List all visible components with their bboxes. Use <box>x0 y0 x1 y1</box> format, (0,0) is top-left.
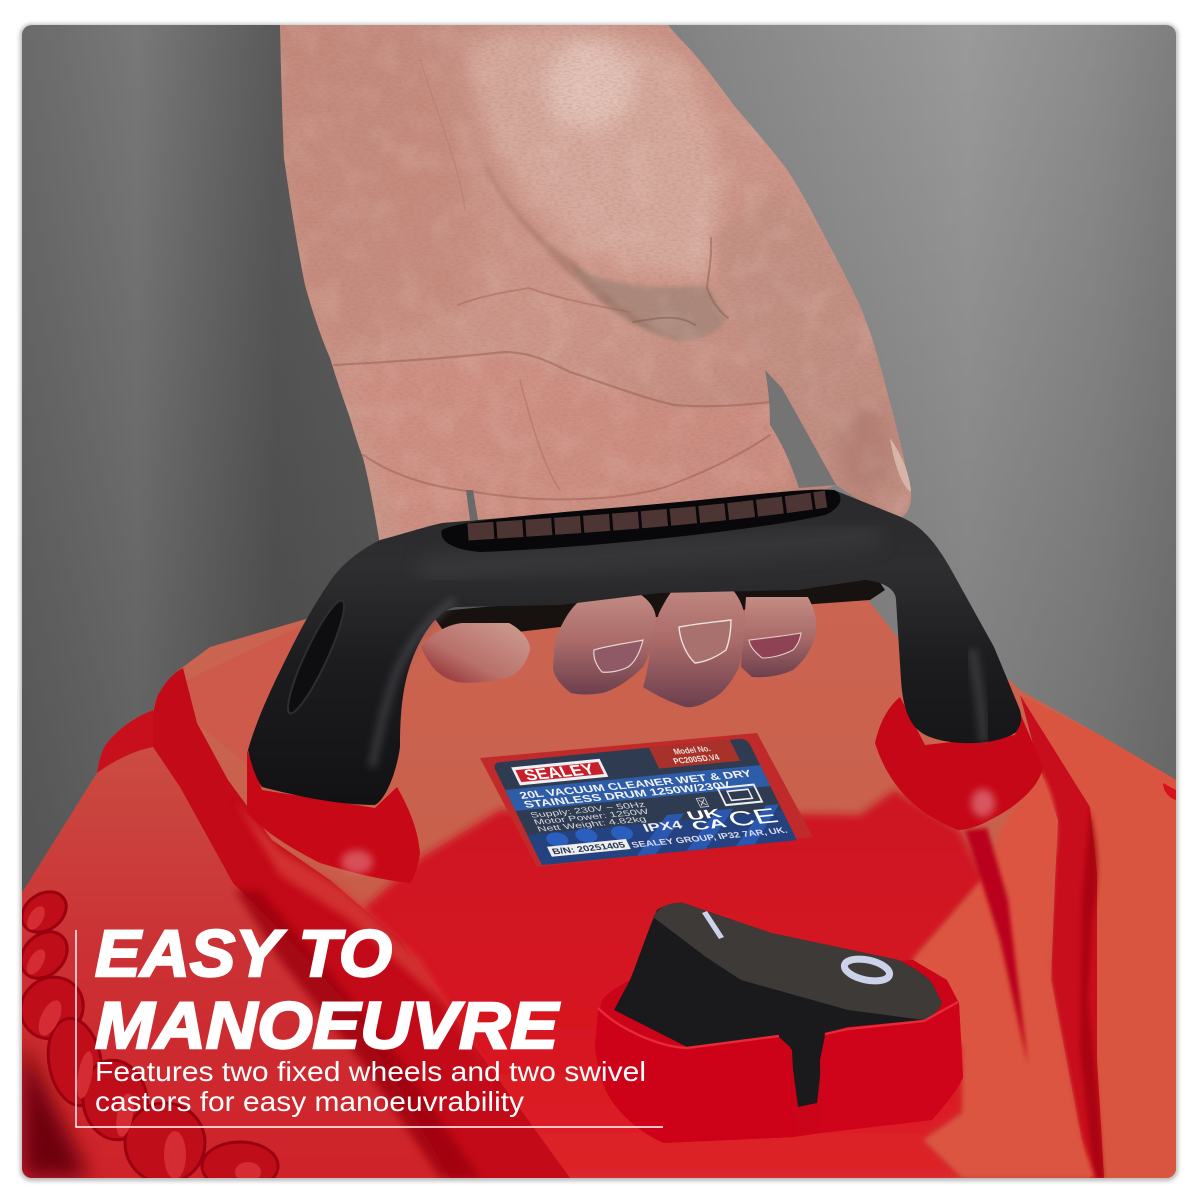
housing right face <box>820 1003 963 1133</box>
switch mark I <box>702 911 724 939</box>
blue title band <box>505 765 770 811</box>
caption <box>76 916 663 1127</box>
lower palm <box>586 406 792 506</box>
description line two: castors for easy manoeuvrability <box>95 1086 524 1117</box>
product title: 20L VACUUM CLEANER WET & DRY <box>518 769 755 802</box>
fingernail four <box>749 633 801 658</box>
ridge shadow <box>235 890 480 1178</box>
switch housing <box>595 960 963 1143</box>
red streak under right collar <box>965 828 1028 1065</box>
skin light blotches <box>308 25 908 514</box>
gap between fingers <box>466 490 478 520</box>
left foot collar <box>247 750 420 883</box>
left lower plate <box>22 747 450 1178</box>
description: Features two fixed wheels and two swivel <box>95 1056 646 1087</box>
heading line two: MANOEUVRE <box>95 988 560 1062</box>
fingernail three <box>679 620 731 663</box>
safety icon three <box>608 825 636 841</box>
bracket lines <box>76 930 663 1127</box>
skin fine texture <box>287 25 858 536</box>
thumb mound highlight <box>469 27 720 274</box>
hand <box>270 20 930 550</box>
lower blue wash <box>527 810 797 865</box>
housing rim highlight <box>598 1002 958 1048</box>
address: SEALEY GROUP, IP32 7AR, UK. <box>629 825 789 850</box>
fingertip shading <box>839 404 891 496</box>
WEEE mark: ☒ <box>694 795 712 811</box>
left raised ridge <box>153 668 570 1178</box>
right ridge dark edge <box>1080 810 1104 1178</box>
inner knuckle fold <box>570 262 728 341</box>
index finger side <box>718 232 906 511</box>
rear bulge <box>97 710 153 773</box>
spec supply: Supply: 230V ~ 50Hz <box>528 800 647 820</box>
finger three <box>643 578 744 707</box>
rubber grip insert <box>468 499 826 532</box>
vacuum body: red drum top <box>22 590 1176 1178</box>
switch mark O <box>842 955 892 985</box>
fingers curled under the handle <box>421 578 817 707</box>
batch number box <box>547 839 631 857</box>
right outer plate <box>1020 695 1176 1178</box>
fold shadow <box>486 165 650 328</box>
model box <box>649 740 740 769</box>
model text: Model No. <box>671 743 712 756</box>
product rating label <box>480 733 813 867</box>
right ridge <box>1020 695 1104 1178</box>
top bar sheen <box>420 535 880 570</box>
safety icon two <box>572 827 600 844</box>
far right hole <box>1163 783 1176 800</box>
switch body <box>614 903 942 1107</box>
SEALEY logo: SEALEY <box>521 761 599 784</box>
spec motor: Motor Power: 1250W <box>532 807 651 827</box>
right leg sheen <box>972 650 984 742</box>
wrist shading <box>294 178 468 335</box>
upper left plate <box>186 625 303 755</box>
switch top face <box>653 903 942 1020</box>
product title line two: STAINLESS DRUM 1250W/230V <box>522 780 733 811</box>
ridge crest <box>241 809 462 1033</box>
right inner salmon strip <box>913 770 1095 1178</box>
blue stripes <box>619 804 797 856</box>
thumb nail <box>890 438 911 492</box>
finger one <box>421 623 530 683</box>
grip pocket <box>441 490 840 552</box>
class II mark <box>718 785 762 805</box>
glossy spot <box>545 40 635 130</box>
model number: PC200SD.V4 <box>671 752 722 766</box>
CE mark: CE <box>724 804 782 831</box>
carry handle <box>248 490 1021 805</box>
finger four <box>741 597 817 677</box>
left leg sheen <box>372 600 455 767</box>
left edge moulded grip bumps <box>22 890 280 1178</box>
palm creases <box>334 60 770 499</box>
underside ribs of handle <box>436 580 885 632</box>
right foot collar <box>875 697 1043 830</box>
finger two <box>553 591 656 694</box>
rocker switch <box>595 903 963 1143</box>
collar highlight <box>341 850 373 874</box>
saturated lower surface <box>340 790 985 1178</box>
UK mark: UK <box>684 806 724 823</box>
housing left face <box>595 1010 796 1143</box>
fingernail two <box>594 640 643 672</box>
CA mark: CA <box>689 816 729 833</box>
label recess <box>480 733 813 867</box>
heading: EASY TO <box>95 916 392 990</box>
safety icon one <box>543 831 571 847</box>
hand silhouette <box>280 25 911 545</box>
right collar highlight <box>971 789 995 817</box>
label face <box>492 738 797 865</box>
IPX4: IPX4 <box>641 819 686 835</box>
handle side slot <box>280 596 352 718</box>
gap between finger and palm <box>765 370 836 488</box>
drum silhouette <box>22 590 1176 1178</box>
SEALEY logo <box>511 759 608 785</box>
batch number: B/N: 20251405 <box>550 840 627 856</box>
spec weight: Nett Weight: 4.82kg <box>535 814 648 834</box>
